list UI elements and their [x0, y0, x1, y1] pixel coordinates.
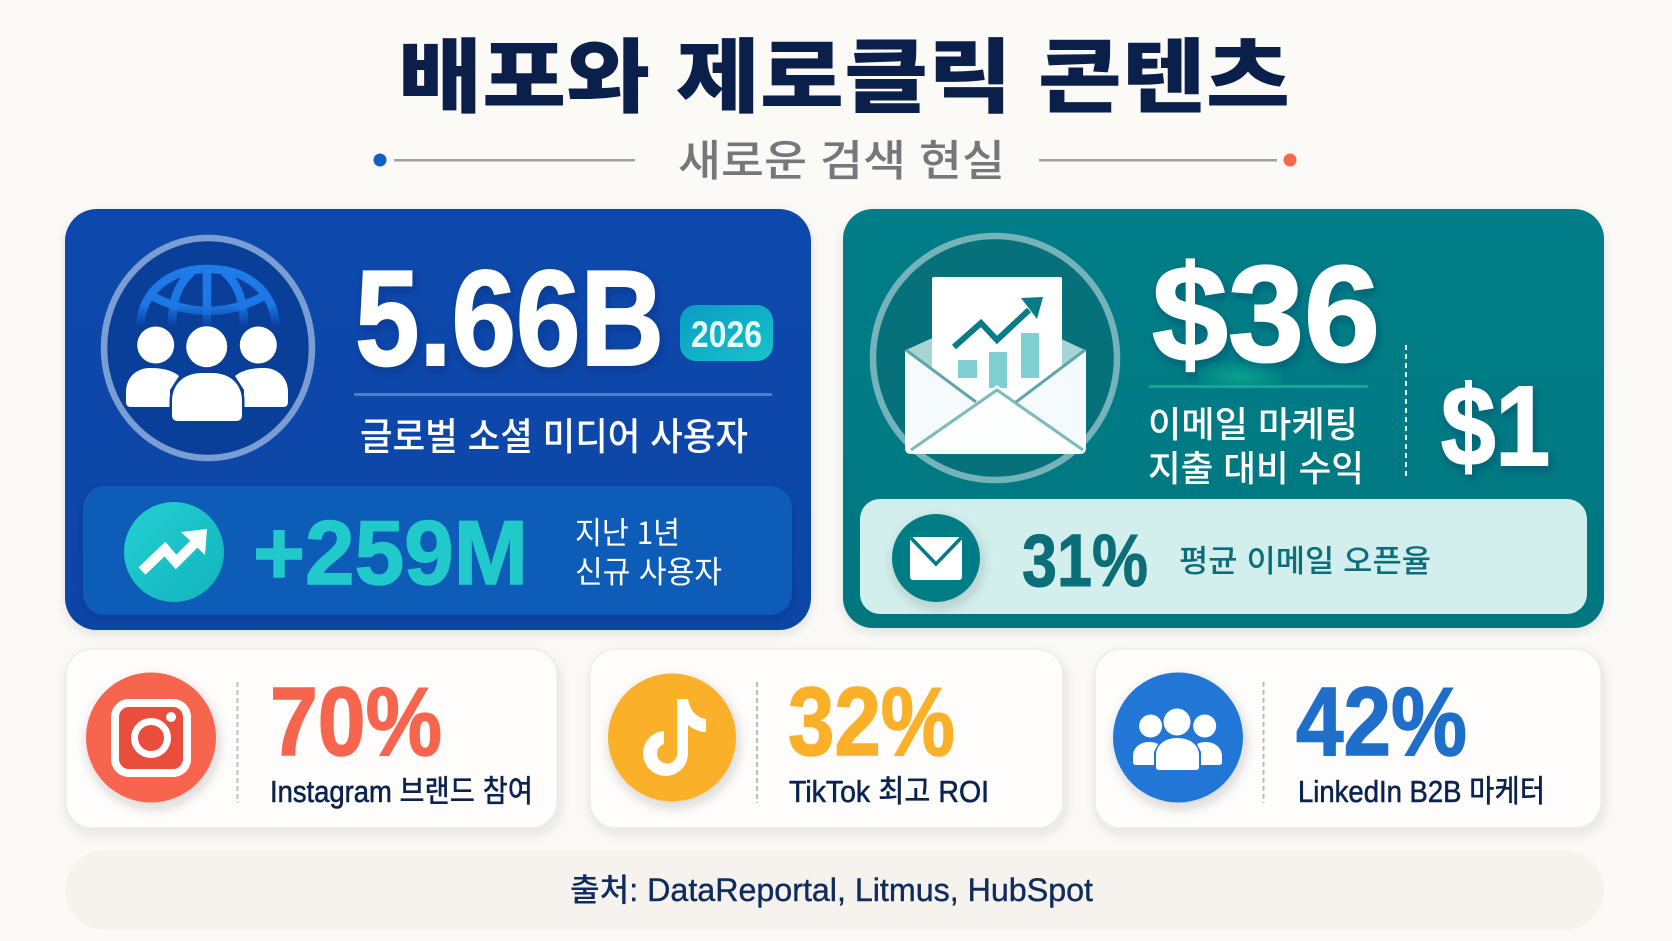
panel: email marketing — [843, 209, 1604, 628]
stat: +259M: +259M — [253, 503, 528, 604]
subtitle with decorative rule: 새로운 검색 현실 — [678, 127, 1005, 189]
icon: email with chart — [873, 236, 1117, 480]
source footer — [65, 850, 1604, 930]
stat: 70%: 70% — [270, 667, 442, 776]
stat: 32%: 32% — [788, 667, 955, 776]
source footer: 출처: DataReportal, Litmus, HubSpot — [570, 865, 1093, 911]
card: TikTok — [590, 649, 1063, 828]
label: global social users: 글로벌 소셜 미디어 사용자 — [360, 406, 748, 461]
badge: 2026: 2026 — [691, 314, 762, 355]
badge: 2026 — [680, 305, 773, 361]
card: LinkedIn — [1095, 649, 1601, 828]
sub panel: open rate — [860, 499, 1587, 614]
sub panel: new users — [83, 486, 792, 615]
panel: social media users — [65, 209, 811, 630]
icon: people group — [1113, 672, 1243, 802]
title: 배포와 제로클릭 콘텐츠 — [398, 13, 1290, 130]
icon: Instagram — [86, 672, 216, 802]
label: Instagram brand engagement: Instagram 브랜드 참여 — [270, 766, 533, 811]
icon: globe and people — [104, 238, 312, 458]
stat: $1: $1 — [1441, 363, 1550, 489]
label: new users last year: 지난 1년 — [575, 508, 680, 553]
label: email ROI: 지출 대비 수익 — [1148, 440, 1364, 492]
label: average open rate: 평균 이메일 오픈율 — [1179, 536, 1431, 581]
label: TikTok top ROI: TikTok 최고 ROI — [789, 766, 989, 811]
label: new users last year: 신규 사용자 — [575, 547, 722, 592]
card: Instagram — [66, 649, 557, 828]
label: email ROI — [1148, 396, 1364, 492]
icon: TikTok — [608, 674, 736, 802]
stat: 5.66B: 5.66B — [355, 242, 664, 394]
stat: 42%: 42% — [1296, 667, 1467, 776]
subtitle with decorative rule — [374, 127, 1296, 189]
icon: growth arrow — [124, 502, 224, 602]
label: LinkedIn B2B marketers: LinkedIn B2B 마케터 — [1298, 766, 1545, 811]
label: email ROI: 이메일 마케팅 — [1148, 396, 1358, 448]
stat: $36: $36 — [1152, 238, 1380, 391]
stat: 31%: 31% — [1022, 519, 1148, 602]
label: new users last year — [575, 508, 722, 592]
icon: mail — [892, 514, 980, 602]
